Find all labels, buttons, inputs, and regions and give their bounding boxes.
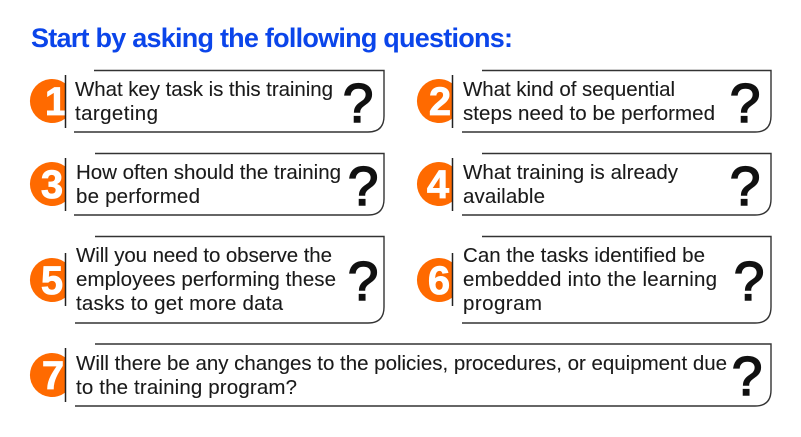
card outline 3 bbox=[74, 154, 384, 215]
text 7 bbox=[76, 352, 727, 399]
divider 1 bbox=[64, 75, 66, 128]
text 2 bbox=[463, 78, 715, 125]
icon: question mark 2: ? bbox=[730, 72, 760, 134]
icon: question mark 7: ? bbox=[732, 345, 762, 407]
icon: question mark 1: ? bbox=[343, 72, 373, 134]
number badge 6: 6 bbox=[428, 259, 450, 303]
card outline 1 bbox=[74, 70, 384, 132]
panel: question 1 bbox=[30, 70, 384, 134]
text 5: employees performing these bbox=[76, 268, 336, 291]
text 1: What key task is this training bbox=[75, 78, 333, 101]
number badge 3 bbox=[30, 162, 65, 207]
icon: question mark 4: ? bbox=[730, 155, 760, 217]
text 6: Can the tasks identified be bbox=[463, 244, 705, 267]
text 2: What kind of sequential bbox=[463, 78, 675, 101]
text 1 bbox=[75, 78, 333, 125]
number badge 2: 2 bbox=[429, 80, 451, 124]
card outline 7 bbox=[75, 344, 771, 406]
number badge 5 bbox=[30, 258, 65, 303]
number badge 1 bbox=[30, 79, 67, 124]
panel: question 7 bbox=[30, 344, 771, 407]
text 4: What training is already bbox=[463, 161, 679, 184]
number badge 2 bbox=[417, 79, 452, 124]
number badge 7 bbox=[30, 353, 65, 398]
text 5: Will you need to observe the bbox=[76, 244, 332, 267]
text 6 bbox=[463, 244, 717, 315]
panel: question 2 bbox=[417, 70, 771, 134]
panel: question 5 bbox=[30, 236, 384, 323]
number badge 1: 1 bbox=[45, 80, 67, 124]
divider 2 bbox=[452, 75, 454, 128]
number badge 5: 5 bbox=[41, 259, 63, 303]
text 3 bbox=[76, 161, 341, 208]
text 3: be performed bbox=[76, 185, 200, 208]
text 6: program bbox=[463, 292, 542, 315]
text 5 bbox=[76, 244, 336, 315]
text 4: available bbox=[463, 185, 545, 208]
card outline 4 bbox=[462, 154, 771, 215]
title: Start by asking the following questions: bbox=[31, 23, 513, 53]
card outline 2 bbox=[462, 70, 771, 132]
divider 3 bbox=[64, 158, 66, 211]
text 1: targeting bbox=[75, 102, 158, 125]
text 6: embedded into the learning bbox=[463, 268, 717, 291]
text 4 bbox=[463, 161, 679, 208]
text 7: Will there be any changes to the policies, procedures, or equipment due bbox=[76, 352, 727, 375]
panel: question 4 bbox=[417, 154, 771, 217]
number badge 4 bbox=[417, 162, 452, 207]
divider 5 bbox=[64, 253, 66, 306]
icon: question mark 5: ? bbox=[348, 250, 378, 312]
divider 7 bbox=[64, 348, 66, 402]
icon: question mark 6: ? bbox=[734, 250, 764, 312]
divider 6 bbox=[452, 253, 454, 306]
text 7: to the training program? bbox=[76, 376, 297, 399]
text 2: steps need to be performed bbox=[463, 102, 715, 125]
divider 4 bbox=[452, 158, 454, 211]
panel: question 3 bbox=[30, 154, 384, 217]
panel: question 6 bbox=[417, 236, 771, 323]
number badge 7: 7 bbox=[42, 354, 64, 398]
card outline 5 bbox=[75, 236, 384, 323]
card outline 6 bbox=[462, 236, 771, 323]
text 5: tasks to get more data bbox=[76, 292, 284, 315]
text 3: How often should the training bbox=[76, 161, 341, 184]
number badge 4: 4 bbox=[427, 163, 450, 207]
number badge 6 bbox=[417, 258, 452, 303]
number badge 3: 3 bbox=[41, 163, 63, 207]
icon: question mark 3: ? bbox=[348, 155, 378, 217]
